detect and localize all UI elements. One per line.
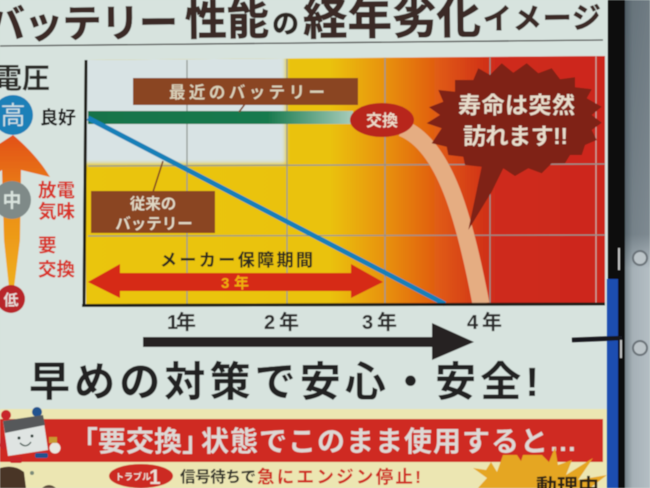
frame [572,0,650,488]
good label: 良好 [40,108,76,128]
label: conventional battery [91,191,215,233]
label: conventional battery: バッテリー [115,216,193,233]
year labels: 3年 [362,311,397,334]
chart [70,40,605,306]
icon: battery mascot [0,407,60,463]
year labels: 1年 [167,311,196,334]
low discharge label [38,180,76,222]
badge: replace [350,103,414,137]
black frame [608,0,626,488]
voltage scale [0,63,76,313]
cream band background [0,409,608,488]
lower warning band [0,407,608,488]
chart background heat gradient [86,56,605,305]
callout: lifespan ends suddenly [427,63,602,230]
year labels: 4年 [467,311,502,334]
low level badge [0,285,25,313]
blue strip [607,279,618,488]
blue line: conventional battery [88,118,445,304]
starburst: orange [473,447,607,488]
leader lines [153,104,245,192]
badge: trouble 1: トラブル [115,471,151,482]
label: conventional battery: 従来の [130,195,176,213]
axes [82,60,605,306]
needs replacement label: 要 [38,235,57,256]
arrow: voltage direction [0,135,50,288]
trouble 1 text: 信号待ちで [180,468,256,486]
callout: lifespan ends suddenly: 訪れます!! [463,123,568,149]
low discharge label: 放電 [38,180,76,201]
arrow: time axis [143,323,474,360]
mid level badge: 中 [2,190,22,212]
trouble 1 text [180,467,421,487]
year labels: 2年 [264,311,299,334]
red banner: 「要交換」 [70,426,210,457]
needs replacement label [38,235,75,280]
title: の [272,9,299,39]
green line: recent battery [88,111,353,124]
title: イメージ [483,3,601,36]
callout: lifespan ends suddenly: 寿命は突然 [458,92,575,118]
headline: 早めの対策で安心・安全! [29,359,539,405]
red banner [0,419,603,462]
low level badge: 低 [3,292,19,309]
badge: replace: 交換 [366,112,398,130]
high level badge: 高 [0,102,26,130]
low discharge label: 気味 [38,201,76,222]
title [0,0,601,48]
icon: person [0,467,56,488]
safe zone white area [86,58,290,169]
trouble 1 text: 急にエンジン停止! [257,467,421,487]
curve: sudden failure [402,128,481,304]
badge: trouble 1 [109,464,173,488]
label: recent battery: 最近のバッテリー [169,83,325,102]
warranty period label: メーカー保障期間 [160,251,313,270]
icon: bolts [633,251,647,355]
clamp [572,248,622,358]
metal post [625,0,650,488]
arrow: 3 year warranty: 3年 [221,274,249,292]
year labels [167,311,502,334]
needs replacement label: 交換 [38,259,75,280]
red banner: 状態でこのまま使用すると… [201,426,577,457]
mid level badge [0,181,31,219]
label: recent battery [133,78,358,105]
arrow: 3 year warranty [88,264,383,298]
high level badge [0,95,33,135]
